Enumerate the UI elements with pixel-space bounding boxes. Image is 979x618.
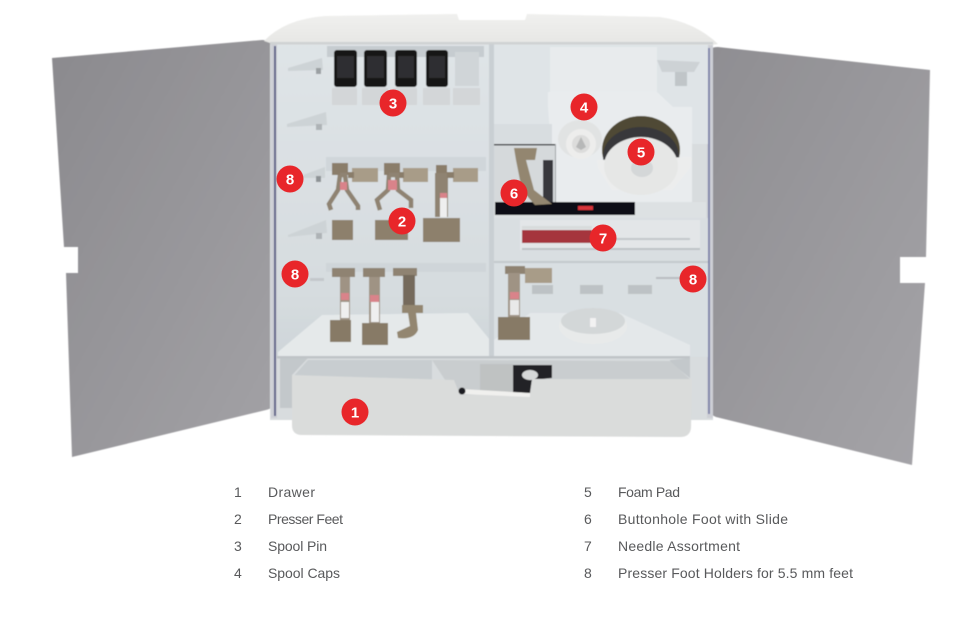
marker 3: 3 bbox=[389, 96, 397, 112]
legend bbox=[234, 484, 853, 581]
shelf tabs bbox=[287, 58, 327, 281]
marker 8 lower left: 8 bbox=[291, 266, 299, 284]
legend item 4: 4 bbox=[234, 565, 242, 581]
marker 3 bbox=[380, 90, 406, 116]
legend item 3 bbox=[234, 538, 327, 554]
legend item 5: Foam Pad bbox=[618, 484, 680, 500]
legend item 3: Spool Pin bbox=[268, 538, 327, 554]
marker 1 bbox=[342, 398, 368, 426]
needle assortment bbox=[494, 218, 708, 263]
buttonhole foot compartment bbox=[494, 144, 706, 218]
right door bbox=[708, 47, 930, 465]
lid shadow edge bbox=[270, 42, 713, 44]
interior floor edge bbox=[277, 356, 690, 358]
legend item 4 bbox=[234, 565, 340, 581]
left compartment bbox=[277, 44, 494, 357]
marker 8 right bbox=[680, 266, 706, 292]
presser foot lower right bbox=[498, 266, 552, 340]
marker 7 bbox=[590, 224, 616, 252]
drawer bbox=[292, 360, 692, 437]
legend item 3: 3 bbox=[234, 538, 242, 554]
legend item 1: Drawer bbox=[268, 484, 315, 500]
legend item 2: 2 bbox=[234, 511, 242, 527]
legend item 8: Presser Foot Holders for 5.5 mm feet bbox=[618, 565, 853, 581]
spool pins bbox=[327, 46, 484, 105]
legend item 2 bbox=[234, 511, 343, 527]
spool cap bbox=[558, 120, 602, 159]
legend item 7: Needle Assortment bbox=[618, 538, 740, 554]
bobbin dish bbox=[559, 308, 627, 344]
marker 5 bbox=[628, 138, 654, 166]
presser feet row 2 bbox=[329, 163, 478, 242]
left door bbox=[52, 40, 275, 457]
legend item 5 bbox=[584, 484, 680, 500]
legend item 8: 8 bbox=[584, 565, 592, 581]
legend item 2: Presser Feet bbox=[268, 511, 343, 527]
legend item 5: 5 bbox=[584, 484, 592, 500]
legend item 6: 6 bbox=[584, 511, 592, 527]
marker 6 bbox=[500, 180, 528, 206]
marker 4: 4 bbox=[580, 100, 589, 116]
legend item 1 bbox=[234, 484, 315, 500]
foam pad bbox=[597, 116, 692, 195]
marker 7: 7 bbox=[599, 230, 607, 248]
marker 8 upper left bbox=[276, 166, 304, 192]
legend item 1: 1 bbox=[234, 484, 242, 500]
right compartment upper bbox=[494, 44, 708, 202]
marker 5: 5 bbox=[637, 144, 645, 162]
legend item 7: 7 bbox=[584, 538, 592, 554]
marker 6: 6 bbox=[510, 186, 518, 202]
marker 8 lower left bbox=[282, 260, 308, 288]
marker 2: 2 bbox=[398, 214, 406, 230]
legend item 6: Buttonhole Foot with Slide bbox=[618, 511, 788, 527]
presser feet row 3 bbox=[330, 268, 423, 345]
photo of opened accessory box bbox=[52, 14, 930, 465]
marker 8 upper left: 8 bbox=[286, 172, 294, 188]
legend item 4: Spool Caps bbox=[268, 565, 340, 581]
right compartment lower bbox=[494, 263, 708, 357]
marker 8 right: 8 bbox=[689, 272, 697, 288]
lid bbox=[264, 14, 718, 45]
box body bbox=[270, 40, 713, 420]
marker 4 bbox=[570, 94, 598, 120]
marker 1: 1 bbox=[351, 404, 359, 422]
marker 2 bbox=[388, 208, 416, 234]
